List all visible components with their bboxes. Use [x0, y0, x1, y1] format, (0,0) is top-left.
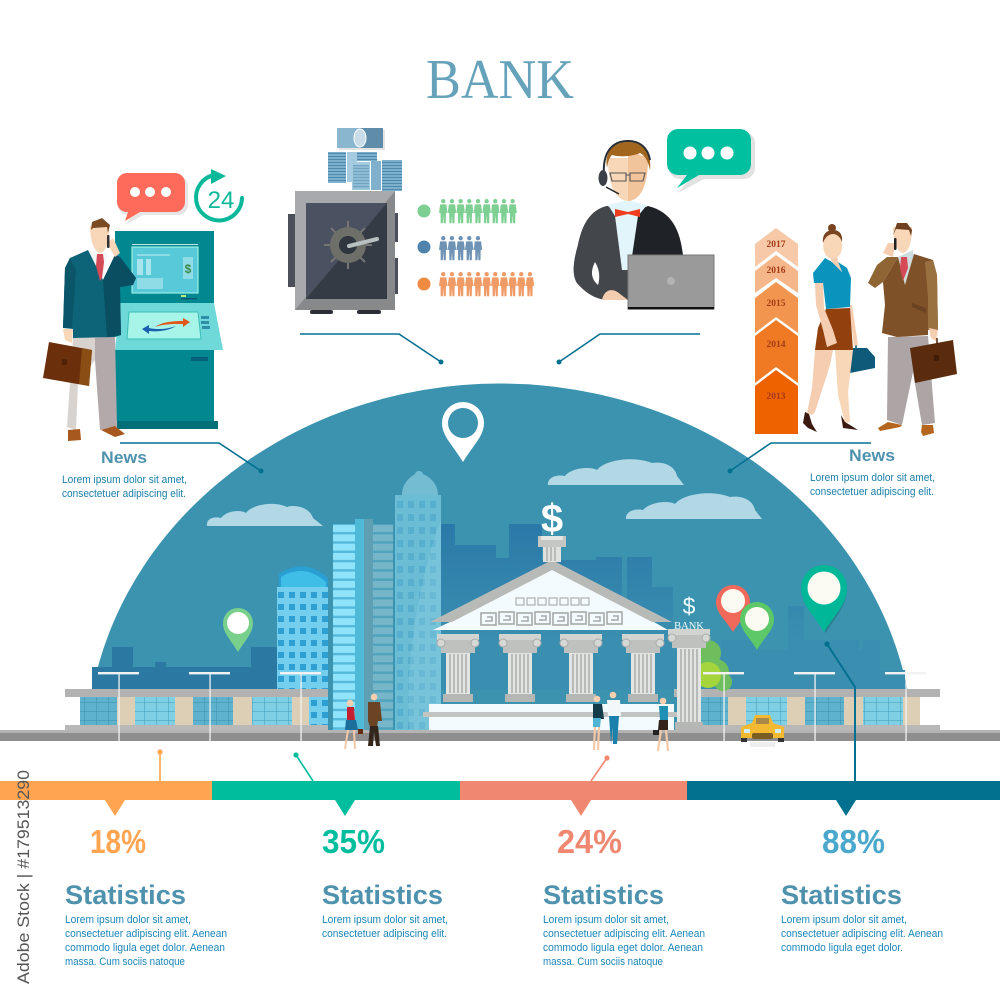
- head: [893, 227, 912, 253]
- city skyline: [92, 524, 905, 690]
- statistics body 4: consectetuer adipiscing elit. Aenean: [781, 928, 943, 940]
- news body right: consectetuer adipiscing elit.: [810, 486, 934, 498]
- briefcase: [910, 340, 957, 383]
- trousers: [887, 336, 935, 425]
- sleeve left: [868, 257, 898, 288]
- call centre operator: [574, 141, 714, 310]
- dollar sign on roof: $: [541, 497, 563, 541]
- timeline arrow: 2017: [766, 240, 786, 250]
- news heading right: News: [849, 447, 895, 465]
- taxi: [741, 715, 784, 747]
- percentage 88: 88%: [822, 823, 885, 860]
- stat column 4: [781, 823, 943, 954]
- cloud left: [207, 504, 323, 526]
- statistics body 2: consectetuer adipiscing elit.: [322, 928, 447, 940]
- neck: [829, 254, 842, 272]
- hand on briefcase: [63, 329, 73, 343]
- businessman left: [43, 218, 136, 441]
- timeline arrow: [755, 228, 798, 434]
- map pin green small: [223, 608, 253, 652]
- statistics body 4: [781, 914, 943, 954]
- road: [0, 730, 1000, 741]
- legend: people chart: [418, 199, 534, 296]
- news body left: Lorem ipsum dolor sit amet,: [62, 474, 187, 486]
- face: [823, 233, 842, 259]
- trees: [695, 640, 732, 691]
- segment 2013: [755, 370, 798, 434]
- right station building: [677, 689, 940, 731]
- speech bubble teal: [667, 129, 755, 193]
- text block: news right: [810, 447, 935, 498]
- icon: 24 hours: 24: [208, 187, 234, 214]
- hair: [91, 218, 110, 233]
- statistics heading 3: Statistics: [543, 880, 664, 910]
- statistics body 4: commodo ligula eget dolor.: [781, 942, 903, 954]
- percentage 24: 24%: [557, 823, 622, 860]
- segment 2017: [755, 228, 798, 267]
- sign column: [668, 629, 710, 730]
- tower three: [395, 471, 441, 730]
- statistics body 1: consectetuer adipiscing elit. Aenean: [65, 928, 227, 940]
- man in brown suit: [368, 694, 382, 746]
- statistics body 1: commodo ligula eget dolor. Aenean: [65, 942, 225, 954]
- map pin red: [716, 585, 750, 632]
- connector lines to bars: [160, 644, 855, 782]
- left station building: [65, 689, 328, 731]
- shirt: [88, 250, 107, 280]
- timeline arrow: 2015: [766, 299, 786, 309]
- icon: 24 hours: [196, 169, 242, 220]
- percentage 35: 35%: [322, 823, 385, 860]
- segment 2015: [755, 282, 798, 333]
- hand and phone: [883, 243, 895, 257]
- people: group at bank: [593, 692, 668, 751]
- jacket: [882, 254, 938, 337]
- hand: [602, 290, 628, 300]
- statistics body 3: massa. Cum sociis natoque: [543, 956, 663, 968]
- timeline arrow: 2013: [766, 392, 786, 402]
- legend row orange: [418, 272, 534, 296]
- shoes: [878, 422, 902, 431]
- bank sign: $: [683, 593, 696, 619]
- statistics body 3: consectetuer adipiscing elit. Aenean: [543, 928, 705, 940]
- statistics heading 1: Statistics: [65, 880, 186, 910]
- ATM screen arrows: [155, 318, 190, 327]
- bank pediment: [430, 560, 672, 622]
- arm: [815, 283, 837, 347]
- pocket: [912, 303, 926, 313]
- cloud top: [548, 459, 684, 485]
- news body left: [62, 474, 187, 500]
- cloud right: [626, 493, 762, 519]
- dome background: [87, 384, 913, 731]
- head: [90, 226, 109, 253]
- segment 2016: [755, 255, 798, 293]
- text block: news left: [62, 449, 187, 500]
- news heading left: News: [101, 449, 147, 467]
- percentage 18: 18%: [90, 823, 146, 860]
- segment 2014: [755, 320, 798, 383]
- shoes: [803, 412, 817, 432]
- cupola: [538, 536, 566, 562]
- trousers: [67, 337, 98, 430]
- connector dots: [157, 641, 830, 761]
- safe: [288, 191, 398, 314]
- timeline arrow: 2014: [766, 340, 786, 350]
- bank sign: [674, 593, 704, 632]
- woman in red: [345, 700, 363, 749]
- hair: [607, 142, 650, 170]
- far arm: [849, 305, 858, 346]
- legs: [807, 350, 833, 415]
- briefcase: [43, 342, 92, 386]
- street lamps: [98, 672, 926, 741]
- statistics heading 4: Statistics: [781, 880, 902, 910]
- ATM machine: [115, 231, 223, 429]
- money stacks: [328, 128, 402, 191]
- face: [608, 158, 648, 201]
- statistics body 2: [322, 914, 448, 940]
- timeline arrow: 2016: [766, 266, 786, 276]
- map pin green: [740, 602, 774, 650]
- hair: [823, 230, 842, 243]
- statistics body 3: [543, 914, 705, 968]
- shirt and tie: [898, 250, 914, 285]
- statistics body 4: Lorem ipsum dolor sit amet,: [781, 914, 907, 926]
- legend row blue: [418, 236, 482, 260]
- businessman right: [868, 223, 957, 436]
- tie: [900, 257, 908, 281]
- news body left: consectetuer adipiscing elit.: [62, 488, 186, 500]
- bank columns: [437, 634, 479, 702]
- woman one: [593, 696, 604, 750]
- businesswoman: [803, 224, 875, 432]
- stat column 1: [65, 823, 227, 968]
- blouse: [813, 258, 851, 309]
- glasses: [610, 173, 645, 181]
- map pin teal: [801, 565, 847, 633]
- stat column 2: [322, 823, 448, 940]
- stat column 3: [543, 823, 705, 968]
- shoes: [68, 429, 81, 441]
- sleeve right: [925, 260, 938, 330]
- statistics body 1: massa. Cum sociis natoque: [65, 956, 185, 968]
- woman two: [607, 692, 621, 744]
- tie: [96, 254, 104, 281]
- people: couple left: [345, 694, 382, 749]
- tower two: [333, 519, 393, 730]
- speech bubble red: [117, 173, 188, 224]
- callout dots: [258, 360, 732, 474]
- news body right: Lorem ipsum dolor sit amet,: [810, 472, 935, 484]
- map pin white: [442, 402, 484, 462]
- news body right: [810, 472, 935, 498]
- bow tie: [615, 209, 640, 217]
- title: BANK: [426, 49, 574, 111]
- hand: [929, 328, 938, 341]
- bank building: [423, 497, 680, 731]
- panel: city dome: [65, 384, 940, 731]
- statistics body 1: [65, 914, 227, 968]
- callout lines: [120, 334, 871, 471]
- statistics body 2: Lorem ipsum dolor sit amet,: [322, 914, 448, 926]
- bank sign: BANK: [674, 621, 704, 632]
- woman three: [653, 698, 668, 751]
- statistics body 1: Lorem ipsum dolor sit amet,: [65, 914, 191, 926]
- hand and phone: [107, 238, 120, 257]
- laptop: [628, 255, 714, 309]
- jacket: [574, 206, 683, 300]
- bank steps: [429, 704, 674, 731]
- statistics body 3: Lorem ipsum dolor sit amet,: [543, 914, 669, 926]
- legend row green: [418, 199, 517, 223]
- segmented statistics bar: [0, 781, 1000, 816]
- jacket: [63, 250, 136, 338]
- skirt: [815, 308, 853, 350]
- handbag: [850, 348, 875, 373]
- tower one: [277, 566, 328, 730]
- statistics heading 2: Statistics: [322, 880, 443, 910]
- stock id side label: Adobe Stock | #179513290: [14, 770, 33, 984]
- ATM machine: $: [185, 262, 192, 276]
- headset: [604, 141, 650, 176]
- statistics body 3: commodo ligula eget dolor. Aenean: [543, 942, 703, 954]
- greek key frieze: [481, 598, 622, 625]
